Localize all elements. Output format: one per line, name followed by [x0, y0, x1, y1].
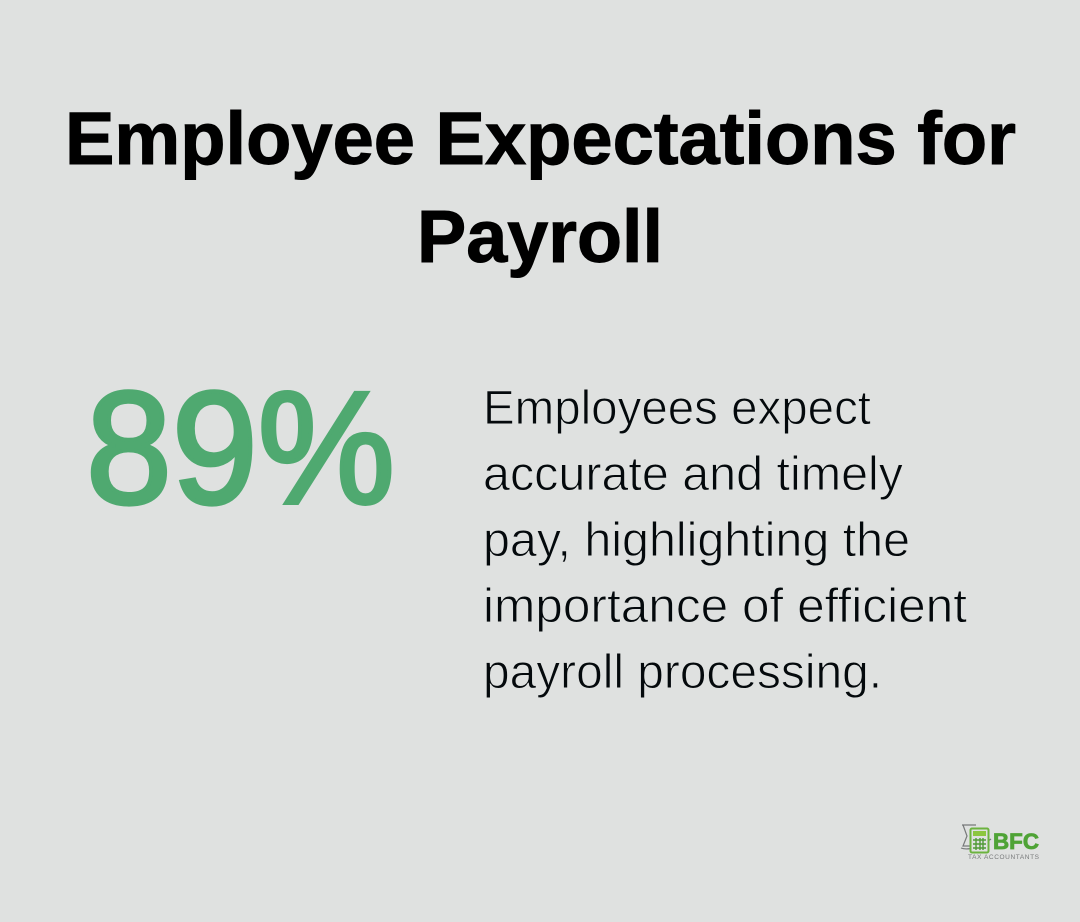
icon: calculator with papers [961, 825, 991, 852]
description text: pay, highlighting the [483, 514, 910, 567]
logo: BFC Tax Accountants [961, 825, 1040, 861]
description text: payroll processing. [483, 646, 882, 699]
description text [483, 382, 967, 699]
description text: accurate and timely [483, 448, 903, 501]
logo wordmark: BFC [993, 829, 1039, 854]
description text: importance of efficient [483, 580, 967, 633]
title: Payroll [417, 195, 663, 278]
title: Employee Expectations for [65, 97, 1016, 180]
title [65, 97, 1016, 278]
description text: Employees expect [483, 382, 871, 435]
statistic: 89%: 89% [86, 358, 395, 537]
logo tagline: TAX ACCOUNTANTS [968, 854, 1040, 861]
